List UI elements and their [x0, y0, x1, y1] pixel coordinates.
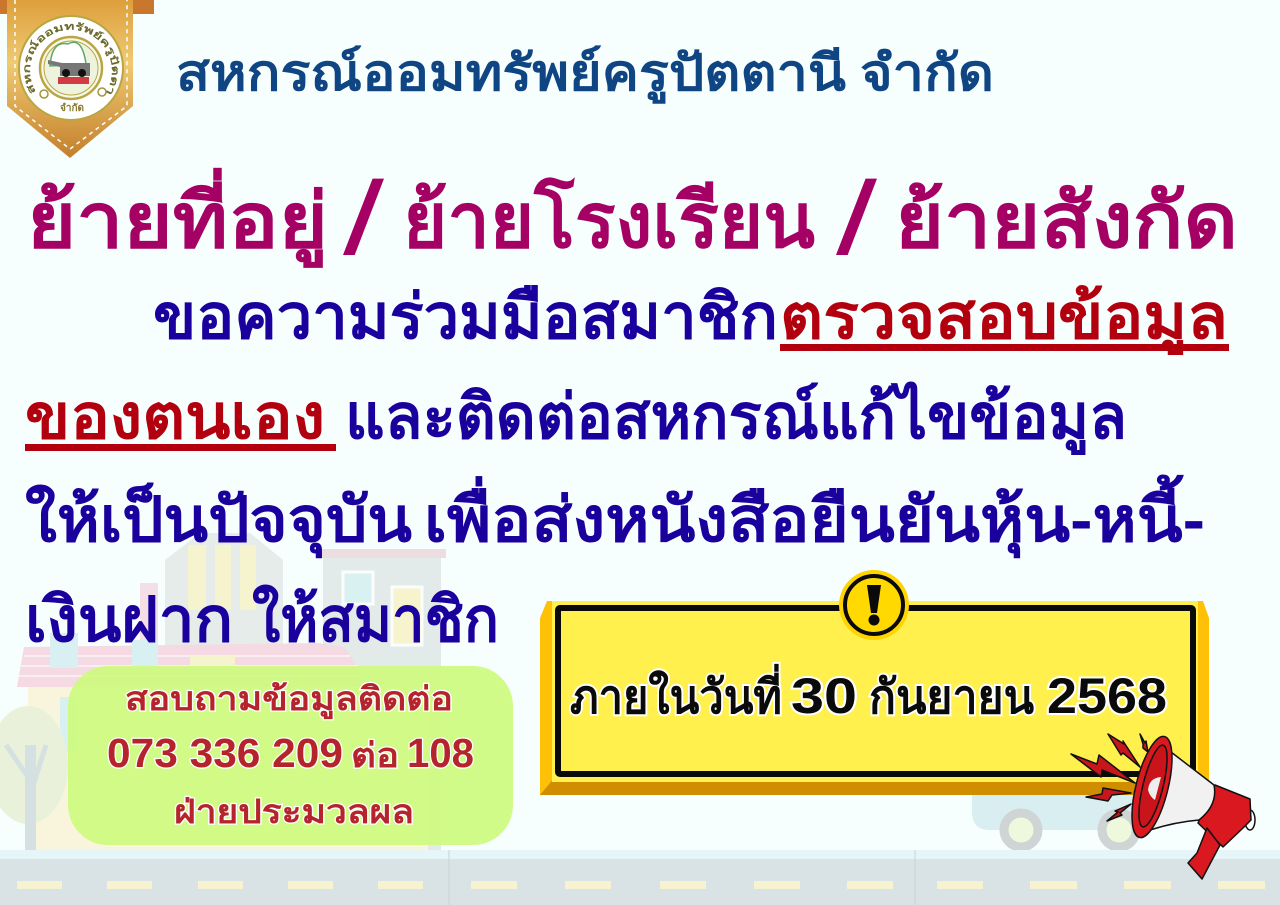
contact phone: 108 [407, 730, 474, 776]
deadline text: ภายในวันที่ [570, 663, 782, 723]
contact phone [107, 730, 474, 776]
deadline text: 2568 [1047, 668, 1167, 724]
icon: warning [839, 570, 909, 640]
deadline text: กันยายน [869, 670, 1034, 723]
message line 3: เพื่อส่งหนังสือยืนยันหุ้น-หนี้- [424, 474, 1205, 558]
deadline text: 30 [791, 668, 857, 724]
message line 2: ของตนเอง [25, 383, 325, 452]
main heading: ย้ายสังกัด [895, 179, 1238, 264]
deadline text [570, 663, 1167, 724]
main heading: ย้ายที่อยู่ [27, 167, 328, 268]
contact phone: 073 336 209 [107, 730, 343, 776]
icon: megaphone [1071, 733, 1255, 879]
seal [18, 15, 124, 121]
message line 1: ขอความร่วมมือสมาชิก [153, 283, 778, 352]
message line 4 [25, 584, 499, 655]
title [176, 45, 994, 104]
deadline panel [540, 570, 1209, 795]
background illustration: houses [0, 533, 446, 853]
message line 1 [153, 283, 1229, 355]
main heading: / [343, 161, 384, 277]
contact department: ฝ่ายประมวลผล [174, 793, 414, 830]
contact phone: ต่อ [351, 737, 399, 775]
message line 2 [25, 381, 1127, 455]
title: จำกัด [860, 45, 994, 101]
message line 3: ให้เป็นปัจจุบัน [25, 482, 412, 558]
message line 2: และติดต่อสหกรณ์แก้ไขข้อมูล [345, 381, 1127, 455]
message line 3 [25, 474, 1205, 558]
contact heading: สอบถามข้อมูลติดต่อ [125, 680, 453, 720]
message line 4: เงินฝาก [25, 586, 233, 655]
main heading: ย้ายโรงเรียน [403, 176, 815, 264]
ribbon badge with cooperative seal [0, 0, 154, 158]
message line 4: ให้สมาชิก [252, 584, 499, 655]
title: สหกรณ์ออมทรัพย์ครูปัตตานี [176, 45, 846, 104]
message line 1: ตรวจสอบข้อมูล [780, 283, 1228, 355]
seal: จำกัด [60, 102, 84, 114]
contact panel [68, 666, 513, 845]
background illustration: truck [972, 795, 1140, 847]
road [0, 850, 1280, 905]
main heading [27, 161, 1238, 277]
main heading: / [836, 161, 877, 277]
